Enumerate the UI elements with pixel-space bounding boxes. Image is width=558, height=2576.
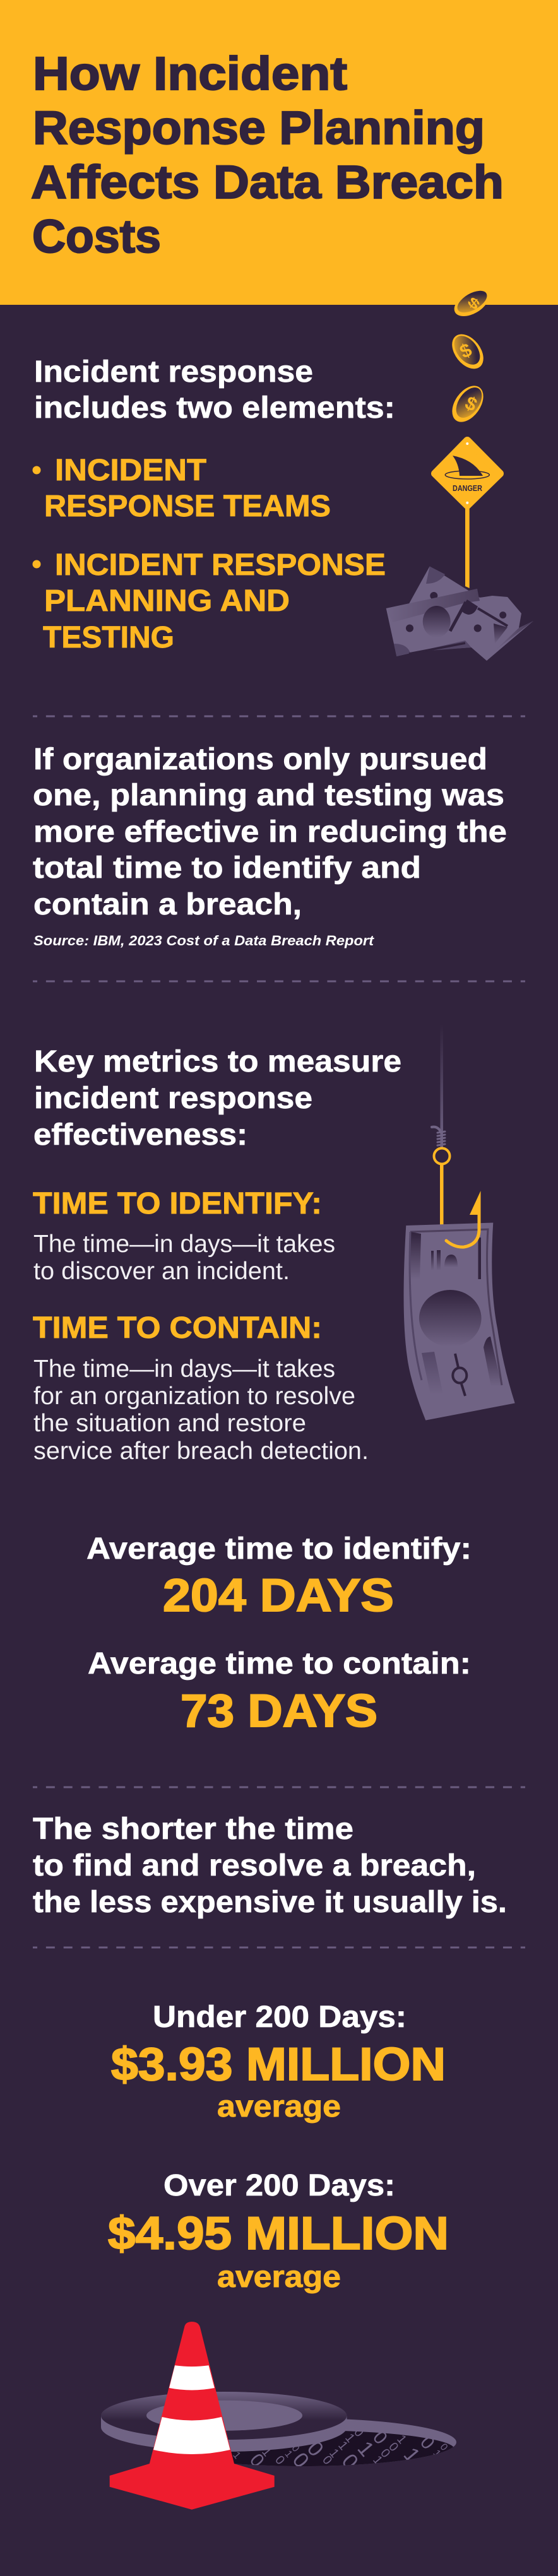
divider bbox=[33, 716, 525, 717]
heading: key metrics: Key metrics to measure bbox=[34, 1045, 401, 1078]
metric: time to identify: The time—in days—it takes bbox=[33, 1231, 335, 1258]
text block: planning and testing finding: contain a breach, bbox=[33, 888, 302, 921]
title: How Incident bbox=[33, 47, 347, 100]
stat: average time to contain bbox=[88, 1647, 471, 1737]
list item: incident response planning and testing: INCIDENT RESPONSE bbox=[55, 548, 386, 582]
icon: coin 1 bbox=[450, 284, 493, 322]
binary digits in the hole: 0 bbox=[437, 2442, 449, 2453]
text block: planning and testing finding: If organizations only pursued bbox=[33, 743, 487, 776]
heading: key metrics: incident response bbox=[34, 1082, 312, 1115]
list item: incident response teams: RESPONSE TEAMS bbox=[44, 490, 331, 523]
panel: two elements bbox=[33, 355, 395, 654]
metric: time to contain: TIME TO CONTAIN: bbox=[33, 1311, 322, 1345]
divider bbox=[33, 1946, 525, 1949]
icon: open manhole bbox=[153, 2419, 456, 2466]
icon: banknote creases bbox=[450, 600, 508, 644]
stat: over 200 days bbox=[108, 2169, 449, 2294]
stat: average time to identify bbox=[86, 1532, 472, 1621]
text block: planning and testing finding: more effective in reducing the bbox=[33, 815, 507, 849]
text block: shorter time: to find and resolve a breach, bbox=[33, 1849, 476, 1882]
text block: shorter time bbox=[33, 1812, 507, 1919]
icon: shark fin bbox=[453, 456, 483, 476]
metric: time to contain: the situation and restore bbox=[33, 1410, 306, 1437]
icon: coin 3 bbox=[446, 380, 490, 428]
icon: right banknote bbox=[421, 596, 533, 661]
metric: time to contain bbox=[33, 1311, 369, 1465]
heading: incident response includes two elements: includes two elements: bbox=[34, 391, 395, 425]
icon: coin 2 bbox=[446, 328, 490, 375]
title: Affects Data Breach bbox=[31, 156, 504, 208]
list item: incident response planning and testing: PLANNING AND bbox=[44, 584, 290, 618]
binary digits in the hole: 1 bbox=[394, 2432, 409, 2447]
text block: planning and testing finding bbox=[33, 743, 507, 948]
binary digits in the hole: 1 bbox=[335, 2438, 350, 2453]
icon: coin 3: $ bbox=[461, 393, 480, 416]
title: Response Planning bbox=[33, 102, 485, 154]
metric: time to identify: to discover an incident. bbox=[33, 1258, 290, 1285]
binary digits in the hole: 1 bbox=[353, 2437, 379, 2461]
illustration: banknote on fishing hook bbox=[404, 1024, 515, 1421]
stat: under 200 days: Under 200 Days: bbox=[153, 2000, 407, 2034]
icon: knot bbox=[432, 1127, 445, 1145]
icon: pole bbox=[465, 509, 470, 588]
illustration: manhole and traffic cone bbox=[101, 2322, 456, 2510]
binary digits in the hole: 0 bbox=[377, 2446, 393, 2461]
binary digits in the hole: 0 bbox=[337, 2449, 363, 2474]
stat: under 200 days: average bbox=[217, 2090, 341, 2124]
header band bbox=[0, 0, 558, 305]
binary digits in the hole: 1 bbox=[282, 2449, 294, 2460]
icon: banknote bbox=[404, 1223, 515, 1421]
binary digits in the hole: 0 bbox=[386, 2440, 401, 2454]
icon: traffic cone bbox=[110, 2322, 275, 2510]
binary digits in the hole: 0 bbox=[302, 2437, 328, 2461]
list item: incident response teams: INCIDENT bbox=[55, 454, 206, 487]
stat: over 200 days: average bbox=[217, 2260, 341, 2294]
sign label: DANGER bbox=[453, 483, 483, 493]
binary digits in the hole: 1 bbox=[370, 2453, 385, 2467]
icon: danger sign bbox=[435, 440, 500, 505]
title bbox=[31, 47, 504, 263]
heading: key metrics: effectiveness: bbox=[33, 1118, 247, 1152]
metric: time to contain: for an organization to resolve bbox=[33, 1383, 355, 1410]
icon: back banknote bbox=[409, 567, 486, 631]
stat: average time to contain: 73 DAYS bbox=[181, 1686, 377, 1737]
binary digits in the hole: 0 bbox=[272, 2453, 287, 2467]
binary digits in the hole: 0 bbox=[289, 2443, 301, 2454]
metric: time to contain: service after breach detection. bbox=[33, 1438, 369, 1465]
list item: incident response teams bbox=[33, 454, 331, 523]
binary digits in the hole bbox=[233, 2431, 448, 2466]
text block: planning and testing finding: one, planning and testing was bbox=[33, 779, 504, 812]
stat: average time to contain: Average time to contain: bbox=[88, 1647, 471, 1681]
binary digits in the hole: 1 bbox=[326, 2446, 341, 2461]
icon: coin 1: $ bbox=[465, 294, 483, 312]
illustration: falling coins bbox=[446, 284, 493, 428]
binary digits in the hole: 1 bbox=[399, 2443, 425, 2467]
icon: fishing line bbox=[441, 1024, 443, 1149]
binary digits in the hole: 0 bbox=[369, 2427, 391, 2449]
title: Costs bbox=[32, 210, 161, 263]
panel: key metrics bbox=[33, 1045, 401, 1465]
icon: hook eye and shank bbox=[434, 1149, 449, 1225]
binary digits in the hole: 0 bbox=[246, 2450, 268, 2471]
binary digits in the hole: 1 bbox=[342, 2431, 357, 2445]
metric: time to identify: TIME TO IDENTIFY: bbox=[33, 1187, 322, 1220]
heading: key metrics bbox=[33, 1045, 401, 1152]
illustration: money pile with danger sign bbox=[386, 440, 533, 661]
icon: coin 2: $ bbox=[456, 340, 475, 363]
heading: incident response includes two elements: Incident response bbox=[34, 355, 313, 389]
list item: incident response planning and testing: TESTING bbox=[43, 621, 174, 654]
stat: average time to identify: 204 DAYS bbox=[163, 1570, 394, 1621]
source note: Source: IBM, 2023 Cost of a Data Breach Report bbox=[33, 933, 375, 948]
binary digits in the hole: 0 bbox=[319, 2453, 335, 2467]
binary digits in the hole: 0 bbox=[351, 2425, 366, 2440]
stat: over 200 days: Over 200 Days: bbox=[163, 2169, 395, 2202]
metric: time to identify bbox=[33, 1187, 335, 1285]
binary digits in the hole: 0 bbox=[416, 2432, 439, 2454]
list item: incident response planning and testing bbox=[33, 548, 386, 654]
binary digits in the hole: 1 bbox=[259, 2445, 274, 2459]
text block: planning and testing finding: total time to identify and bbox=[33, 851, 421, 885]
divider bbox=[33, 1786, 525, 1788]
binary digits in the hole: 0 bbox=[288, 2448, 314, 2473]
binary digits in the hole: 1 bbox=[230, 2450, 242, 2461]
text block: shorter time: the less expensive it usually is. bbox=[33, 1886, 507, 1919]
text block: shorter time: The shorter the time bbox=[33, 1812, 353, 1846]
stat: under 200 days bbox=[111, 2000, 446, 2124]
heading: incident response includes two elements bbox=[34, 355, 395, 425]
icon: manhole lid bbox=[101, 2392, 347, 2452]
stat: under 200 days: $3.93 MILLION bbox=[111, 2039, 446, 2090]
binary digits in the hole: 1 bbox=[430, 2448, 442, 2459]
stat: average time to identify: Average time to identify: bbox=[86, 1532, 472, 1566]
metric: time to contain: The time—in days—it takes bbox=[33, 1356, 335, 1383]
icon: hook barb bbox=[446, 1191, 481, 1247]
divider bbox=[33, 981, 525, 982]
stat: over 200 days: $4.95 MILLION bbox=[108, 2208, 449, 2259]
icon: front banknote bbox=[386, 589, 480, 656]
